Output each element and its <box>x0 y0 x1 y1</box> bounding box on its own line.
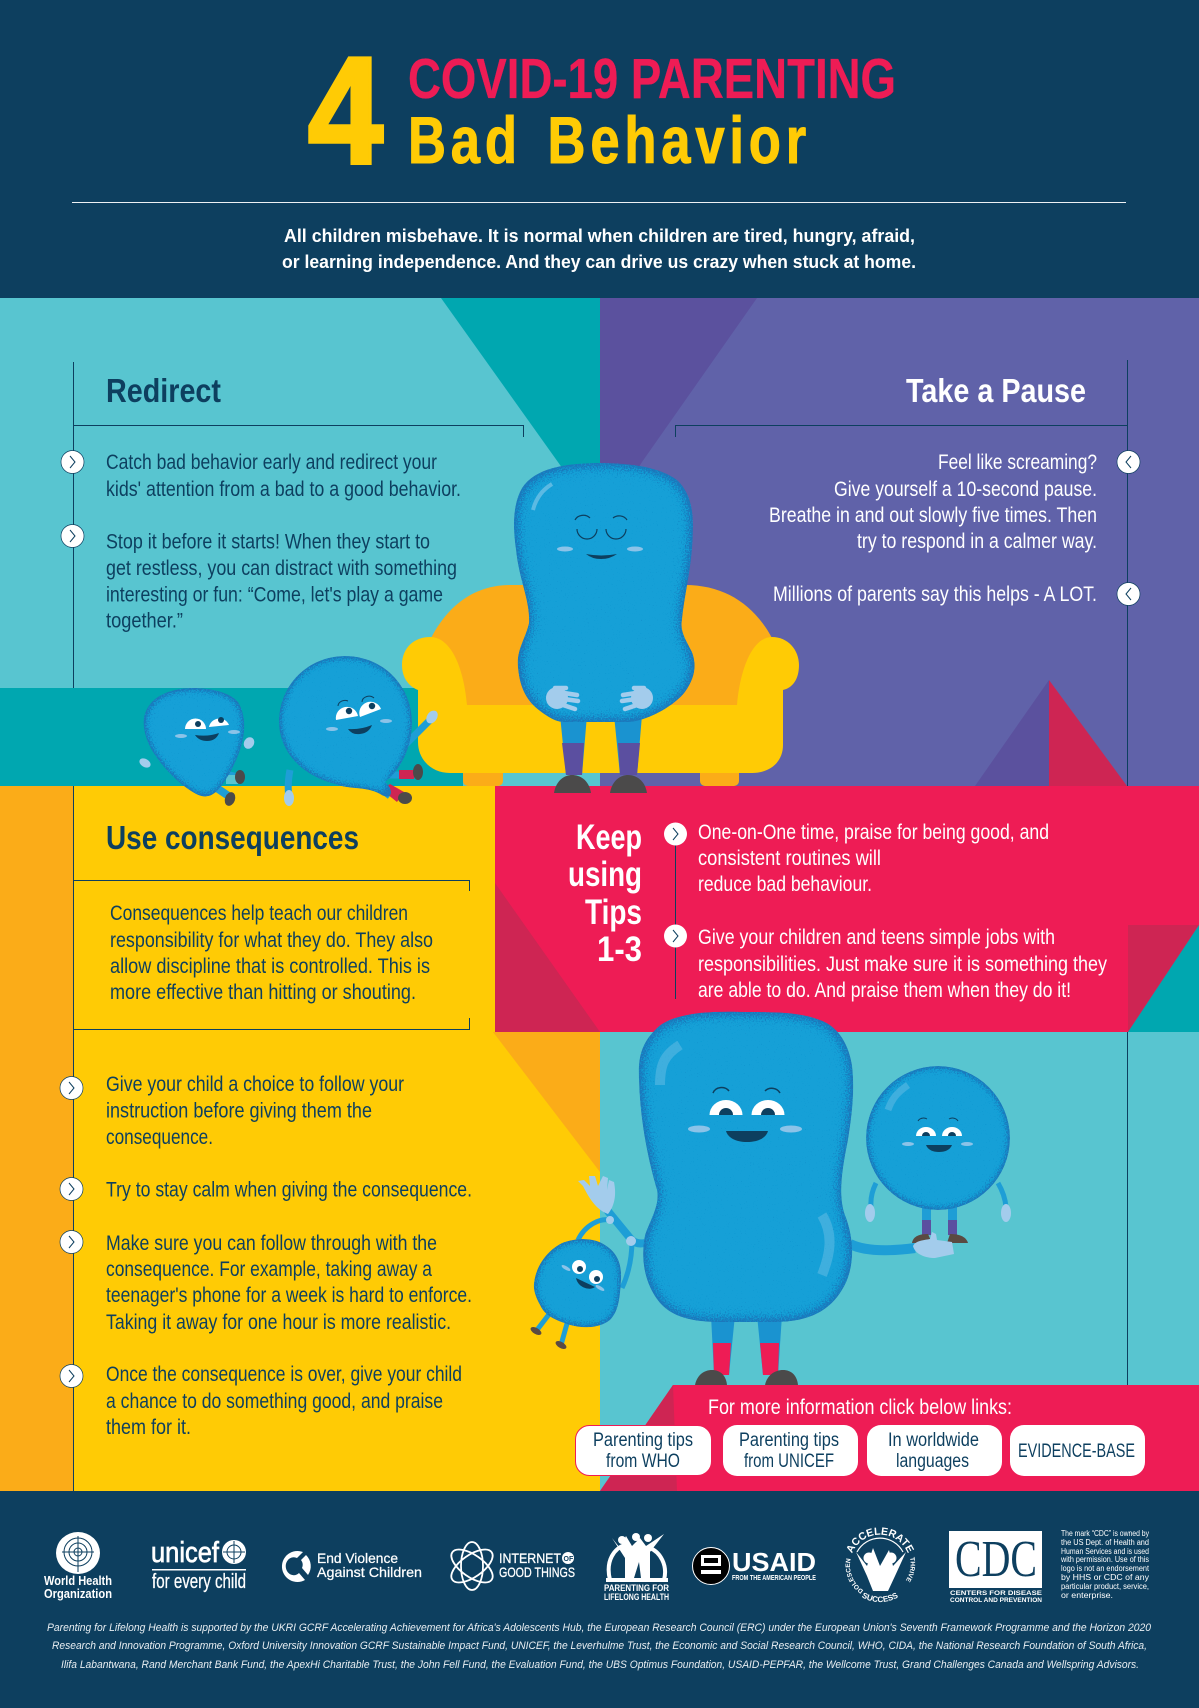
panel: use consequences background <box>0 786 600 1491</box>
body <box>639 1012 853 1322</box>
heading: use consequences: Use consequences <box>106 819 359 856</box>
text block: keep using tips: consistent routines will <box>698 847 881 870</box>
text block: pause tips: Give yourself a 10-second pause. <box>834 478 1097 501</box>
logo: internet of good things <box>446 1542 575 1590</box>
icon: bullet <box>1117 582 1140 606</box>
text block: consequences tips: consequence. <box>106 1126 213 1149</box>
logo: CDC <box>949 1531 1043 1604</box>
panel: footer background <box>0 1491 1199 1708</box>
text block: consequences intro: more effective than hitting or shouting. <box>110 981 416 1004</box>
heading: keep using tips 1-3 <box>568 818 642 969</box>
heading: take a pause: Take a Pause <box>906 372 1086 409</box>
button: parenting tips from WHO: Parenting tips <box>593 1430 693 1451</box>
hands <box>284 790 294 806</box>
closed eyes and face <box>575 515 627 539</box>
panel: keep using tips background <box>495 786 1199 1032</box>
text block: redirect tips: Stop it before it starts! When they start to <box>106 530 430 554</box>
text block: consequences tips: Taking it away for one hour is more realistic. <box>106 1311 451 1334</box>
supporting hand <box>913 1232 954 1258</box>
CDC disclaimer: the US Dept. of Health and <box>1061 1538 1149 1547</box>
text block: redirect tips <box>106 451 461 632</box>
text block: consequences tips: them for it. <box>106 1416 191 1439</box>
waving hand <box>578 1176 615 1214</box>
panel text: redirect <box>61 372 461 632</box>
panel: lower right teal background <box>600 1032 1199 1491</box>
logo: parenting for lifelong health <box>604 1533 669 1602</box>
logo: CDC: CONTROL AND PREVENTION <box>950 1597 1042 1604</box>
logo: CDC: CDC <box>955 1531 1037 1588</box>
icon: bullet <box>61 450 84 474</box>
logo: internet of good things: GOOD THINGS <box>499 1564 575 1580</box>
title line two: Bad Behavior <box>408 103 811 177</box>
logo: parenting for lifelong health: PARENTING FOR <box>604 1583 669 1593</box>
text block: pause tips <box>769 451 1097 606</box>
logo: accelerate: SUCCESS <box>862 1592 898 1602</box>
body <box>866 1066 1010 1210</box>
text block: consequences tips: a chance to do something good, and praise <box>106 1390 443 1413</box>
shoes <box>912 1234 932 1243</box>
links heading: For more information click below links: <box>708 1396 1012 1419</box>
illustration: large standing character <box>578 1012 915 1385</box>
logo: unicef: unicef <box>151 1537 220 1569</box>
logo: accelerate: THRIVE <box>906 1556 916 1582</box>
text block: keep using tips <box>698 821 1107 1002</box>
text block: consequences intro: Consequences help teach our children <box>110 902 408 925</box>
logo: end violence against children: End Violence <box>317 1550 398 1566</box>
intro text <box>282 225 916 272</box>
button: parenting tips from WHO: from WHO <box>606 1451 680 1472</box>
logo: World Health Organization: World Health <box>44 1573 112 1588</box>
CDC disclaimer: logo is not an endorsement <box>1061 1564 1150 1573</box>
text block: consequences intro: allow discipline that is controlled. This is <box>110 955 430 978</box>
icon: bullet <box>60 1230 83 1254</box>
face <box>916 1127 936 1136</box>
text block: consequences tips <box>106 1073 472 1439</box>
body <box>144 688 244 796</box>
logo: accelerate <box>846 1527 916 1602</box>
text block: consequences tips: consequence. For example, taking away a <box>106 1258 432 1281</box>
button: evidence-base: EVIDENCE-BASE <box>1018 1441 1135 1462</box>
illustration: medium child on left <box>279 656 440 806</box>
text block: consequences tips: Make sure you can follow through with the <box>106 1232 437 1255</box>
icon: bullet <box>60 1364 83 1388</box>
CDC disclaimer: with permission. Use of this <box>1060 1555 1149 1564</box>
button: parenting tips from UNICEF: Parenting tips <box>739 1430 839 1451</box>
limbs <box>288 720 430 798</box>
body <box>514 463 695 722</box>
logo: parenting for lifelong health: LIFELONG HEALTH <box>604 1592 669 1602</box>
redirect frame lines <box>74 362 524 688</box>
CDC disclaimer <box>1060 1529 1150 1600</box>
body <box>534 1239 621 1327</box>
button: parenting tips from WHO <box>576 1426 712 1476</box>
icon: bullet <box>60 1178 83 1200</box>
arms <box>871 1183 1006 1207</box>
text block: redirect tips: together.” <box>106 610 183 632</box>
header rule <box>72 202 1126 203</box>
intro text: All children misbehave. It is normal when children are tired, hungry, afraid, <box>284 225 915 246</box>
text block: redirect tips: get restless, you can distract with something <box>106 557 457 580</box>
logo: CDC: CENTERS FOR DISEASE <box>950 1590 1043 1597</box>
CDC disclaimer: The mark “CDC” is owned by <box>1061 1529 1149 1538</box>
consequences frame lines <box>74 786 470 1491</box>
face <box>572 1260 586 1274</box>
credits text: Ilifa Labantwana, Rand Merchant Bank Fund, the ApexHi Charitable Trust, the John Fell Fund, the Evaluation Fund, the UBS Optimus Foundation, USAID-PEPFAR, the Wellcome Trust, Grand Challenges Canada and Wellspring Advisors. <box>61 1659 1139 1671</box>
text block: consequences tips: Try to stay calm when giving the consequence. <box>106 1178 472 1202</box>
CDC disclaimer: or enterprise. <box>1061 1591 1113 1600</box>
heading: keep using tips 1-3: 1-3 <box>597 930 642 969</box>
hands <box>546 687 653 709</box>
panel text: take a pause <box>769 372 1140 606</box>
text block: consequences intro: responsibility for what they do. They also <box>110 929 433 952</box>
logo: end violence against children <box>282 1550 422 1582</box>
button: parenting tips from UNICEF <box>723 1425 858 1476</box>
panel text: keep using tips <box>568 818 1107 1002</box>
heading: keep using tips 1-3: Tips <box>585 893 642 932</box>
text block: keep using tips: One-on-One time, praise for being good, and <box>698 821 1049 844</box>
button: evidence-base <box>1010 1425 1145 1476</box>
credits text: Parenting for Lifelong Health is supported by the UKRI GCRF Accelerating Achievement for Africa's Adolescents Hub, the European Research Council (ERC) under the European Union's Seventh Framework Programme and the Horizon 2020 <box>47 1622 1152 1634</box>
title number: 4 <box>308 26 383 196</box>
logo: USAID: USAID <box>732 1547 816 1577</box>
heading: keep using tips 1-3: Keep <box>576 818 642 857</box>
text block: redirect tips: Catch bad behavior early and redirect your <box>106 451 437 474</box>
logo: accelerate: ADOLESCENT <box>846 1558 864 1594</box>
face <box>185 718 206 729</box>
logo: accelerate: ACCELERATE <box>847 1527 914 1554</box>
text block: keep using tips: reduce bad behaviour. <box>698 873 872 896</box>
button: in worldwide languages <box>867 1425 1002 1476</box>
heading: keep using tips 1-3: using <box>568 855 642 894</box>
arms <box>578 1220 632 1288</box>
logo: internet of good things: INTERNET <box>499 1550 561 1566</box>
divider line with bullets <box>664 822 687 999</box>
panel: redirect background <box>0 298 600 786</box>
panel text: use consequences <box>60 819 472 1439</box>
arms <box>607 1210 645 1243</box>
icon: bullet <box>60 1076 83 1100</box>
icon: bullet <box>1117 450 1140 474</box>
logo: unicef: for every child <box>152 1571 246 1593</box>
mouth and cheeks <box>726 1131 768 1142</box>
credits text <box>47 1622 1152 1671</box>
text block: pause tips: Breathe in and out slowly five times. Then <box>769 504 1097 527</box>
logo: USAID: FROM THE AMERICAN PEOPLE <box>732 1575 816 1582</box>
face <box>336 707 358 720</box>
text block: pause tips: Feel like screaming? <box>938 451 1097 474</box>
limbs <box>205 772 240 797</box>
take a pause frame lines <box>676 360 1128 786</box>
text block: consequences tips: instruction before giving them the <box>106 1100 372 1122</box>
text block: pause tips: try to respond in a calmer way. <box>857 530 1097 553</box>
heading: redirect: Redirect <box>106 372 221 409</box>
button: parenting tips from UNICEF: from UNICEF <box>744 1451 834 1472</box>
CDC disclaimer: Human Services and is used <box>1061 1547 1149 1556</box>
logo: USAID <box>692 1547 816 1584</box>
shoes <box>554 775 591 793</box>
text block: consequences tips: teenager's phone for a week is hard to enforce. <box>106 1284 472 1307</box>
illustration: yellow armchair <box>402 585 799 786</box>
logo: internet of good things: OF <box>564 1556 574 1563</box>
illustration: round character held up <box>865 1066 1011 1258</box>
CDC disclaimer: by HHS or CDC of any <box>1061 1573 1149 1582</box>
button: in worldwide languages: languages <box>896 1451 969 1472</box>
panel: take a pause background <box>600 298 1199 786</box>
shoes <box>695 1370 727 1385</box>
legs <box>922 1205 931 1235</box>
credits text: Research and Innovation Programme, Oxford University Innovation GCRF Sustainable Impact Fund, UNICEF, the Leverhulme Trust, the Economic and Social Research Council, WHO, CIDA, the National Research Foundation of South Africa, <box>52 1640 1147 1652</box>
icon: bullet <box>61 524 84 548</box>
logo: World Health Organization <box>44 1532 112 1601</box>
illustration: tiny dangling child <box>529 1216 636 1351</box>
text block: keep using tips: are able to do. And praise them when they do it! <box>698 979 1071 1002</box>
text block: consequences tips: Give your child a choice to follow your <box>106 1073 404 1096</box>
header band <box>0 0 1199 298</box>
logo: end violence against children: Against Children <box>317 1564 422 1580</box>
body <box>279 656 412 797</box>
legs <box>711 1315 735 1375</box>
panel: links <box>576 1385 1199 1491</box>
logo: World Health Organization: Organization <box>44 1586 112 1601</box>
intro text: or learning independence. And they can drive us crazy when stuck at home. <box>282 251 916 272</box>
text block: consequences intro <box>110 902 433 1004</box>
text block: keep using tips: responsibilities. Just make sure it is something they <box>698 953 1107 976</box>
text block: redirect tips: kids' attention from a bad to a good behavior. <box>106 478 461 501</box>
legs <box>560 715 587 775</box>
text block: keep using tips: Give your children and teens simple jobs with <box>698 926 1055 949</box>
text block: pause tips: Millions of parents say this helps - A LOT. <box>773 583 1097 606</box>
title line one: COVID-19 PARENTING <box>408 47 896 111</box>
illustration: small child on left <box>138 688 256 807</box>
illustration: sitting character with closed eyes <box>514 463 695 793</box>
logo: unicef <box>151 1537 246 1593</box>
hands <box>138 757 152 769</box>
text block: consequences tips: Once the consequence is over, give your child <box>106 1363 462 1386</box>
CDC disclaimer: particular product, service, <box>1061 1582 1149 1591</box>
legs <box>537 1313 568 1345</box>
eyes <box>710 1100 742 1115</box>
text block: redirect tips: interesting or fun: “Come, let's play a game <box>106 584 443 606</box>
button: in worldwide languages: In worldwide <box>888 1430 979 1451</box>
